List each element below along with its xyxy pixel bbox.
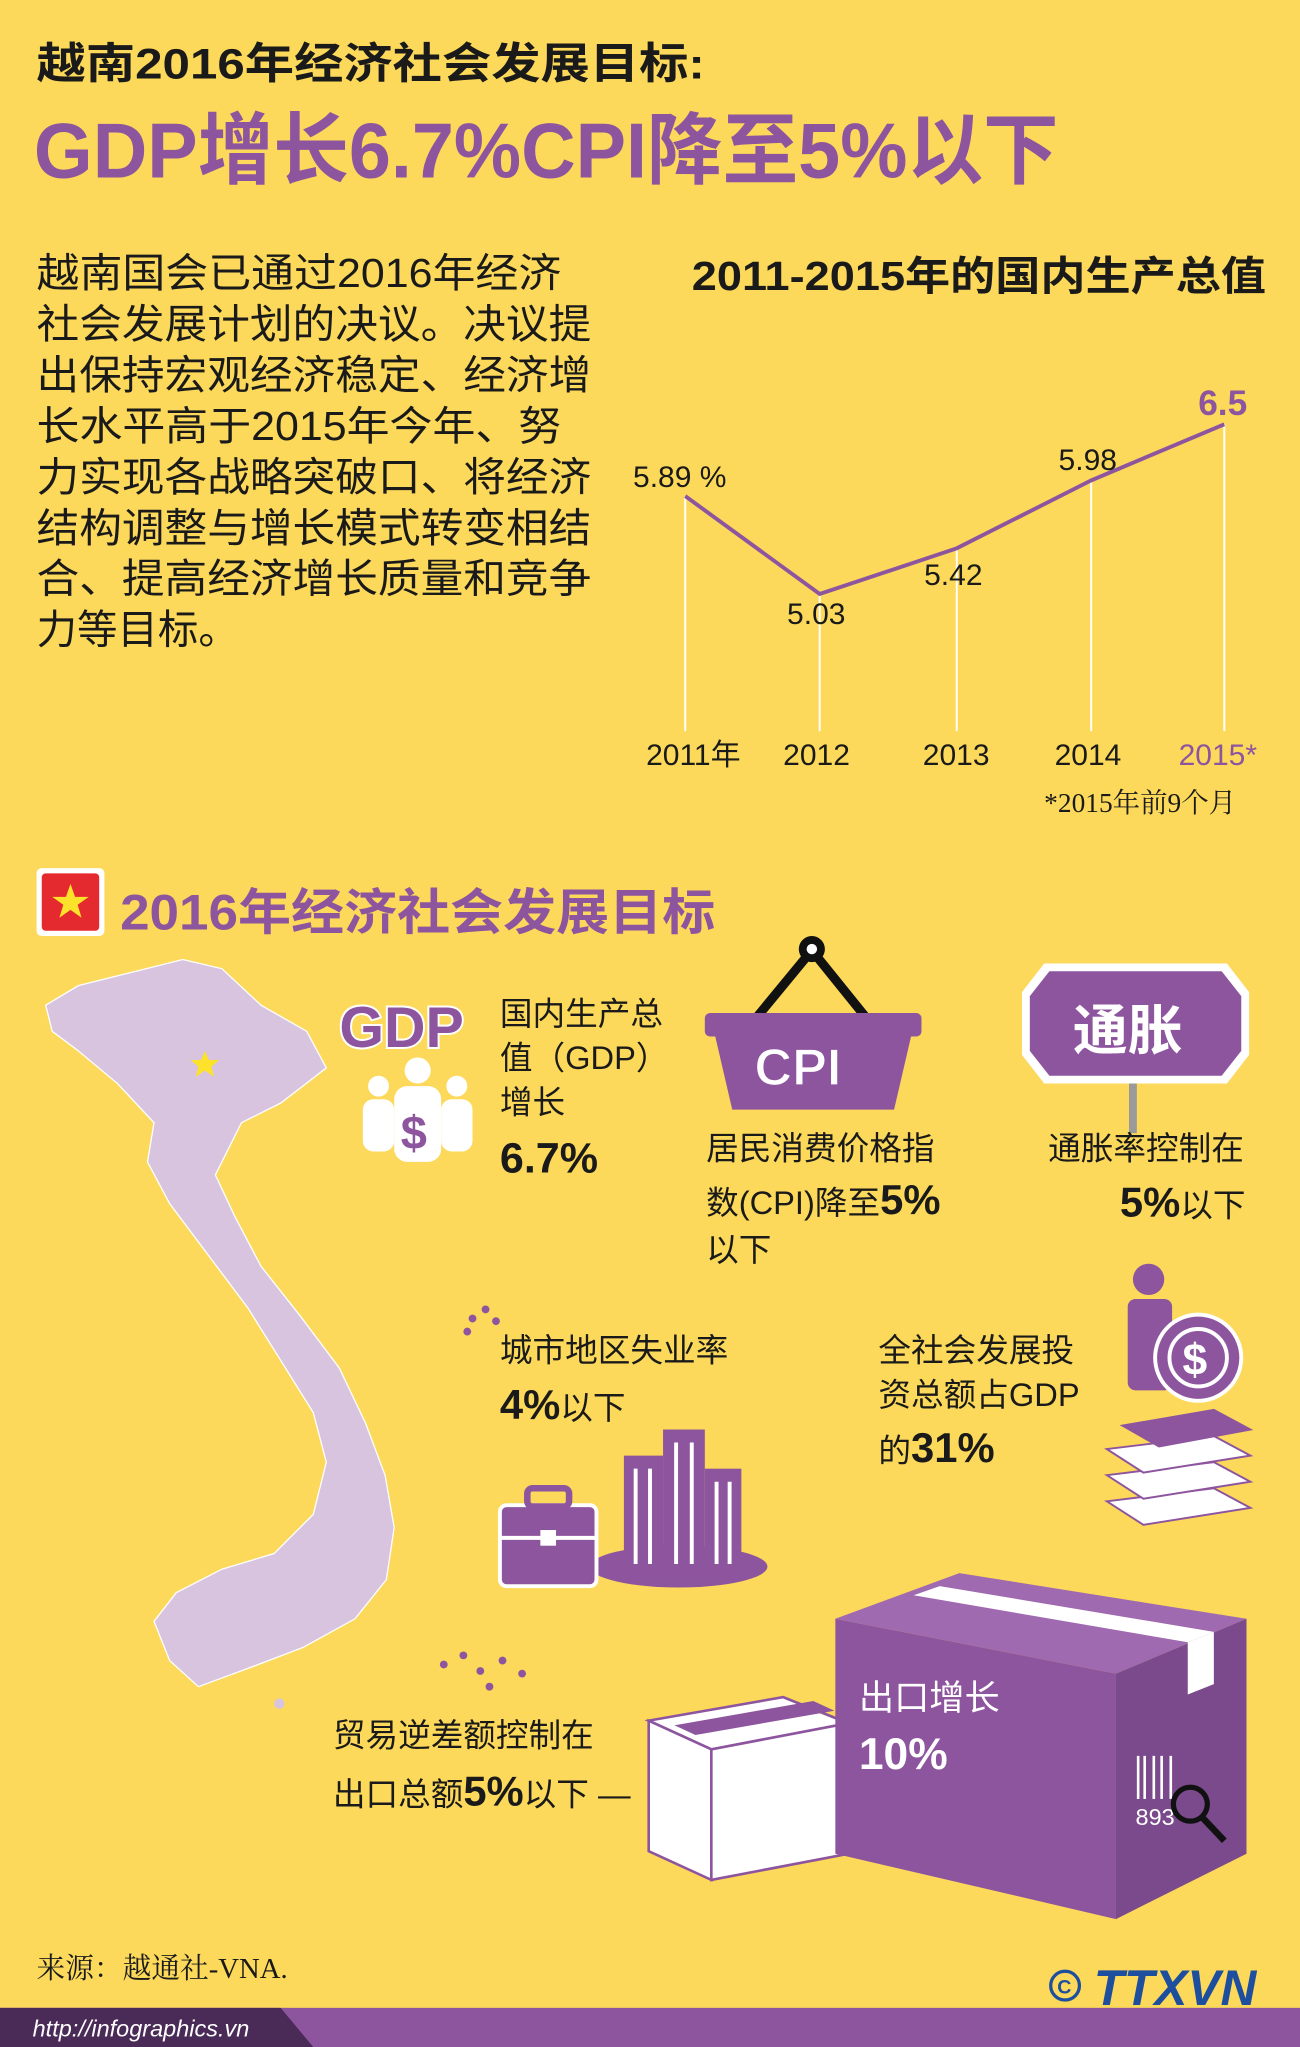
item: unemployment (463, 1305, 767, 1587)
intro paragraph: 合、提高经济增长质量和竞争 (37, 556, 591, 602)
line chart: GDP 2011-2015: 2015* (1179, 739, 1257, 772)
chart title: 2011-2015年的国内生产总值 (692, 253, 1266, 299)
item: GDP growth: 增长 (500, 1084, 565, 1121)
intro paragraph: 长水平高于2015年今年、努 (37, 403, 561, 449)
item: investment (878, 1264, 1250, 1525)
intro paragraph: 出保持宏观经济稳定、经济增 (37, 352, 591, 398)
line chart: GDP 2011-2015: 2012 (783, 739, 850, 772)
item: GDP growth: 6.7% (500, 1134, 598, 1182)
line chart: GDP 2011-2015: 5.03 (787, 598, 845, 631)
icon: barcode (1136, 1756, 1224, 1841)
item: CPI: 居民消费价格指 (706, 1129, 934, 1166)
line chart: GDP 2011-2015 (633, 384, 1257, 818)
item: unemployment: 城市地区失业率 (500, 1332, 728, 1369)
intro paragraph: 结构调整与增长模式转变相结 (37, 505, 591, 551)
title (34, 40, 1059, 195)
line chart: GDP 2011-2015: 5.98 (1059, 444, 1117, 477)
item: trade deficit (333, 1651, 848, 1880)
source: 来源：越通社-VNA. (37, 1953, 288, 1985)
item: export growth box: 10% (859, 1730, 948, 1779)
footer bar (0, 2008, 1300, 2047)
icon: man with coin and money stacks: $ (1183, 1336, 1208, 1385)
item: unemployment: 4%以下 (500, 1381, 626, 1428)
item: GDP growth: 值（GDP） (500, 1039, 668, 1076)
icon: briefcase and buildings (500, 1430, 767, 1587)
item: inflation: 通胀率控制在 (1048, 1129, 1244, 1166)
intro paragraph: 力实现各战略突破口、将经济 (37, 454, 591, 500)
line chart: GDP 2011-2015: *2015年前9个月 (1044, 788, 1236, 818)
logo: TTXVN: TTXVN (1094, 1960, 1258, 2016)
icon: CPI basket (705, 936, 921, 1110)
logo: TTXVN: C (1057, 1976, 1071, 1998)
intro paragraph: 社会发展计划的决议。决议提 (37, 301, 591, 347)
logo: TTXVN: Vietnam News Agency (1136, 2012, 1241, 2023)
item: CPI: 以下 (706, 1231, 771, 1268)
icon: GDP people: $ (401, 1106, 427, 1159)
line chart: GDP 2011-2015: 6.5 (1198, 384, 1247, 423)
item: GDP growth: 国内生产总 (500, 995, 663, 1032)
line chart: GDP 2011-2015: 5.42 (924, 559, 983, 592)
title: GDP增长6.7%CPI降至5%以下 (34, 107, 1059, 195)
icon: GDP people (339, 996, 472, 1162)
item: export growth box (835, 1573, 1246, 1919)
item: GDP growth (339, 995, 668, 1182)
line chart: GDP 2011-2015: 2013 (923, 739, 990, 772)
footer bar: http://infographics.vn (33, 2016, 249, 2042)
item: investment: 资总额占GDP (878, 1376, 1080, 1413)
icon: white box (649, 1697, 848, 1880)
section heading: 2016年经济社会发展目标 (120, 885, 715, 941)
title: 越南2016年经济社会发展目标: (37, 40, 705, 88)
item: CPI: 数(CPI)降至5% (706, 1176, 940, 1223)
line chart: GDP 2011-2015: 2014 (1055, 739, 1121, 772)
item: investment: 的31% (878, 1424, 995, 1471)
icon: Vietnam flag (37, 868, 104, 936)
item: inflation: 5%以下 (1120, 1179, 1245, 1226)
intro paragraph (37, 250, 591, 653)
icon: barcode: 893 (1136, 1804, 1175, 1830)
item: inflation (1022, 963, 1249, 1226)
line chart: GDP 2011-2015: 5.89 % (633, 461, 726, 494)
item: trade deficit: 贸易逆差额控制在 (333, 1717, 594, 1754)
map of Vietnam (46, 960, 394, 1709)
intro paragraph: 越南国会已通过2016年经济 (37, 250, 561, 296)
item: CPI (705, 936, 940, 1268)
intro paragraph: 力等目标。 (37, 607, 239, 653)
icon: inflation sign (1022, 963, 1249, 1133)
item: trade deficit: 出口总额5%以下 — (333, 1767, 631, 1814)
icon: inflation sign: 通胀 (1073, 1000, 1183, 1062)
line chart: GDP 2011-2015: 2011年 (646, 739, 741, 772)
icon: CPI basket: CPI (754, 1039, 841, 1097)
item: investment: 全社会发展投 (878, 1332, 1074, 1369)
icon: man with coin and money stacks (1107, 1264, 1250, 1525)
icon: GDP people: GDP (339, 996, 464, 1060)
item: export growth box: 出口增长 (859, 1679, 1000, 1718)
